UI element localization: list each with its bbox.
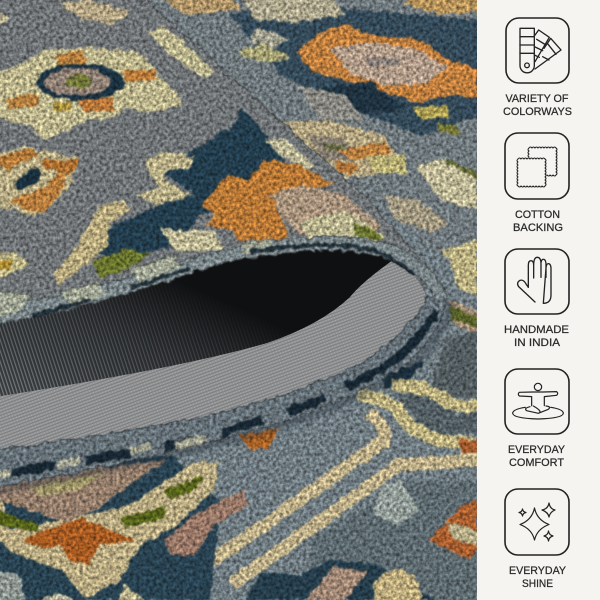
- label: variety of colorways: COLORWAYS: [503, 106, 572, 118]
- shadow: [0, 248, 393, 397]
- top cream motif: [58, 0, 130, 24]
- label: handmade in india: HANDMADE: [504, 324, 569, 336]
- medallion top right: [130, 0, 480, 290]
- upper pile band: [0, 236, 447, 326]
- rug floor surface: [0, 0, 480, 600]
- large flower: [0, 47, 185, 140]
- label: everyday comfort: COMFORT: [509, 457, 564, 469]
- rolled rug rim: [0, 236, 447, 489]
- central arabesque: [0, 108, 385, 285]
- underside backing: [0, 248, 426, 451]
- label: variety of colorways: VARIETY OF: [506, 93, 569, 105]
- icon: meditating figure: [505, 369, 569, 434]
- icon: colour fan deck: [506, 18, 569, 83]
- navy yarn streaks: [12, 312, 436, 472]
- icon: hand: [505, 249, 569, 314]
- light backing: [0, 248, 426, 451]
- label: everyday shine: EVERYDAY: [509, 565, 567, 577]
- feature: cotton backing: [505, 133, 569, 234]
- feature: variety of colorways: [503, 18, 572, 118]
- label: everyday shine: SHINE: [522, 578, 553, 590]
- label: everyday comfort: EVERYDAY: [508, 444, 566, 456]
- dark lip along opening: [30, 245, 415, 316]
- cream shapes right edge: [385, 159, 477, 405]
- bottom left flower: [0, 428, 280, 600]
- icon: sparkles: [505, 489, 569, 555]
- label: cotton backing: COTTON: [515, 209, 560, 221]
- cream diagonal stripe: [147, 26, 215, 78]
- folded rug top surface: [0, 0, 447, 326]
- left flower: [0, 147, 80, 216]
- dark weave in shadow: [0, 248, 393, 397]
- cream arcs below fold: [200, 360, 478, 585]
- lower rim: [0, 297, 447, 489]
- icon: fabric swatches: [505, 133, 569, 199]
- feature: everyday shine: [505, 489, 569, 590]
- upper band lumps: [0, 238, 275, 318]
- feature: everyday comfort: [505, 369, 569, 469]
- shadow under rim: [0, 300, 452, 492]
- label: handmade in india: IN INDIA: [514, 337, 561, 349]
- cream yarn tufts: [0, 438, 205, 477]
- feature: handmade in india: [504, 249, 569, 349]
- lower right field: [245, 480, 477, 600]
- label: cotton backing: BACKING: [513, 222, 563, 234]
- sidebar: [477, 0, 600, 600]
- flower right of fold: [275, 120, 407, 178]
